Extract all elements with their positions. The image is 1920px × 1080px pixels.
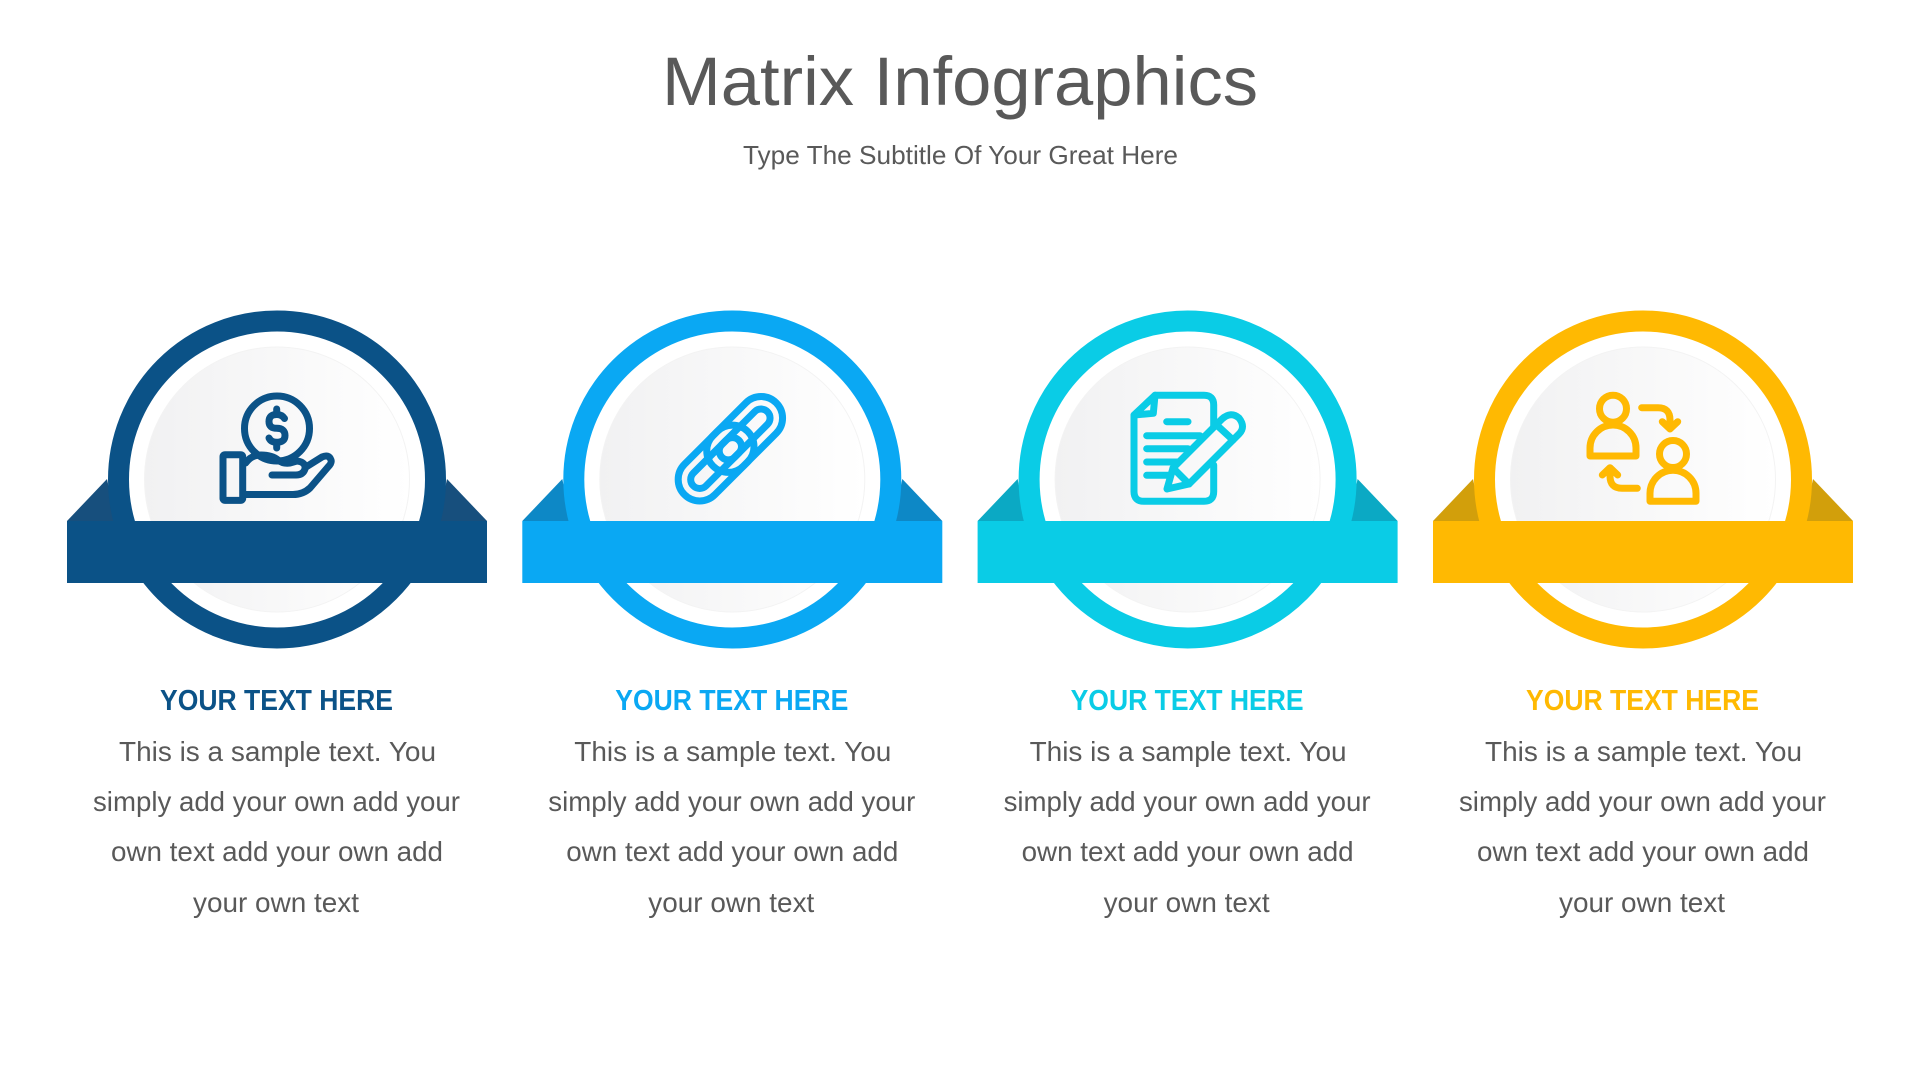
body text: simply add your own add your [1004,786,1371,817]
body text: own text add your own add [1477,836,1809,867]
icon: two people exchanging [1590,395,1696,501]
body text: own text add your own add [1022,836,1354,867]
body text: own text add your own add [111,836,443,867]
subtitle: Type The Subtitle Of Your Great Here [743,140,1178,170]
body text: simply add your own add your [548,786,915,817]
heading: YOUR TEXT HERE [1071,685,1304,717]
badge: cyan ring and ribbon [978,321,1398,638]
panel: column 4 [1433,321,1853,918]
heading: YOUR TEXT HERE [160,685,393,717]
badge: navy ring and ribbon [67,321,487,638]
heading: YOUR TEXT HERE [615,685,848,717]
body text [1004,736,1371,918]
icon: hand holding dollar coin [223,396,331,500]
body text [548,736,915,918]
panel: column 1 [67,321,487,918]
body text: This is a sample text. You [1485,736,1802,767]
body text [1459,736,1826,918]
icon: document with pencil [1134,395,1242,501]
badge: yellow ring and ribbon [1433,321,1853,638]
body text: simply add your own add your [93,786,460,817]
title: Matrix Infographics [662,43,1258,120]
panel: column 3 [978,321,1398,918]
body text: This is a sample text. You [574,736,891,767]
body text: This is a sample text. You [119,736,436,767]
body text: own text add your own add [566,836,898,867]
heading: YOUR TEXT HERE [1526,685,1759,717]
body text: your own text [1104,887,1270,918]
body text: your own text [648,887,815,918]
icon: chain link [669,388,791,510]
body text: simply add your own add your [1459,786,1826,817]
badge: blue ring and ribbon [522,321,942,638]
body text: your own text [193,887,359,918]
body text: your own text [1559,887,1725,918]
body text [93,736,460,918]
body text: This is a sample text. You [1030,736,1347,767]
panel: column 2 [522,321,942,918]
